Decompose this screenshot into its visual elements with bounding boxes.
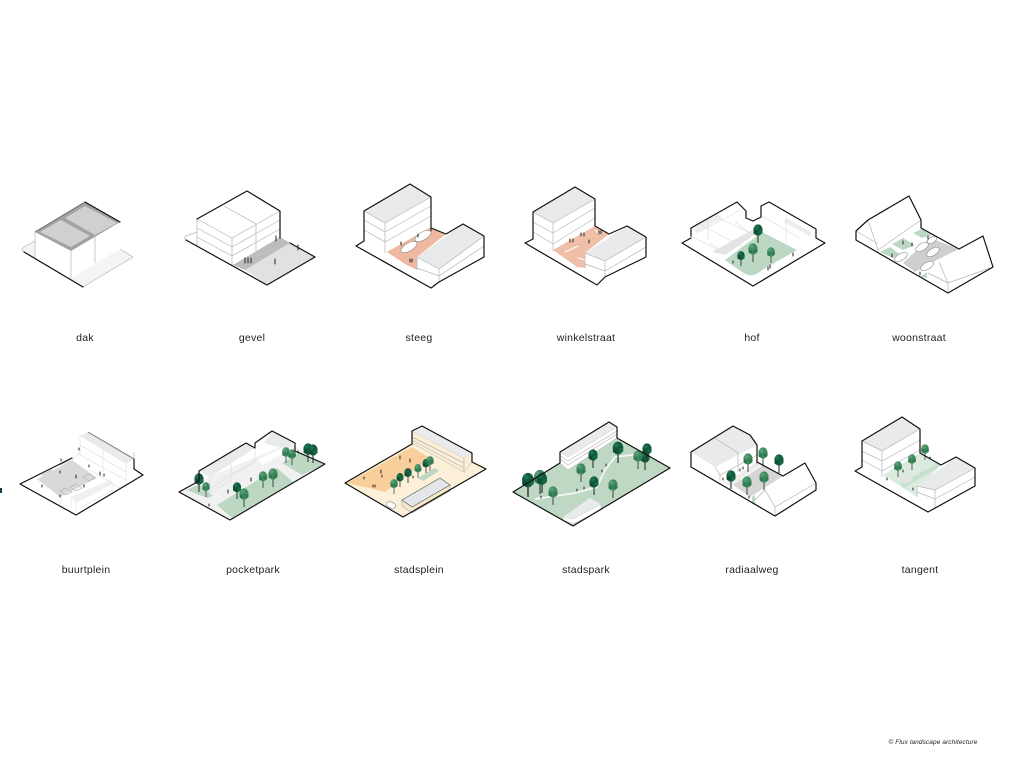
labels: row 2: stadsplein — [394, 564, 444, 576]
diagram: steeg — [356, 184, 484, 288]
diagram: pocketpark — [179, 431, 325, 520]
labels: row 1: dak — [76, 332, 94, 344]
labels: row 1: gevel — [239, 332, 265, 344]
labels: row 2: radiaalweg — [725, 564, 779, 576]
diagram: woonstraat — [856, 196, 993, 293]
labels: row 2: pocketpark — [226, 564, 280, 576]
diagram: tangent — [855, 417, 975, 512]
diagram: stadsplein — [345, 426, 486, 517]
labels: row 1: winkelstraat — [556, 332, 615, 344]
diagram: stadspark — [513, 422, 670, 526]
labels: row 1 — [76, 332, 946, 344]
labels: row 1: woonstraat — [891, 332, 946, 344]
labels: row 1: hof — [744, 332, 760, 344]
labels: row 1: steeg — [406, 332, 432, 344]
diagram: winkelstraat — [525, 187, 646, 285]
diagram: hof — [682, 202, 825, 286]
diagram: buurtplein — [20, 432, 143, 515]
diagram: radiaalweg — [691, 426, 816, 516]
labels: row 2: stadspark — [562, 564, 610, 576]
labels: row 2: buurtplein — [62, 564, 110, 576]
labels: row 2: tangent — [902, 564, 938, 576]
credit: © Flux landscape architecture — [889, 738, 978, 746]
edge mark — [0, 488, 2, 493]
diagram: dak — [22, 202, 133, 287]
labels: row 2 — [62, 564, 938, 576]
diagram: gevel — [184, 191, 315, 285]
